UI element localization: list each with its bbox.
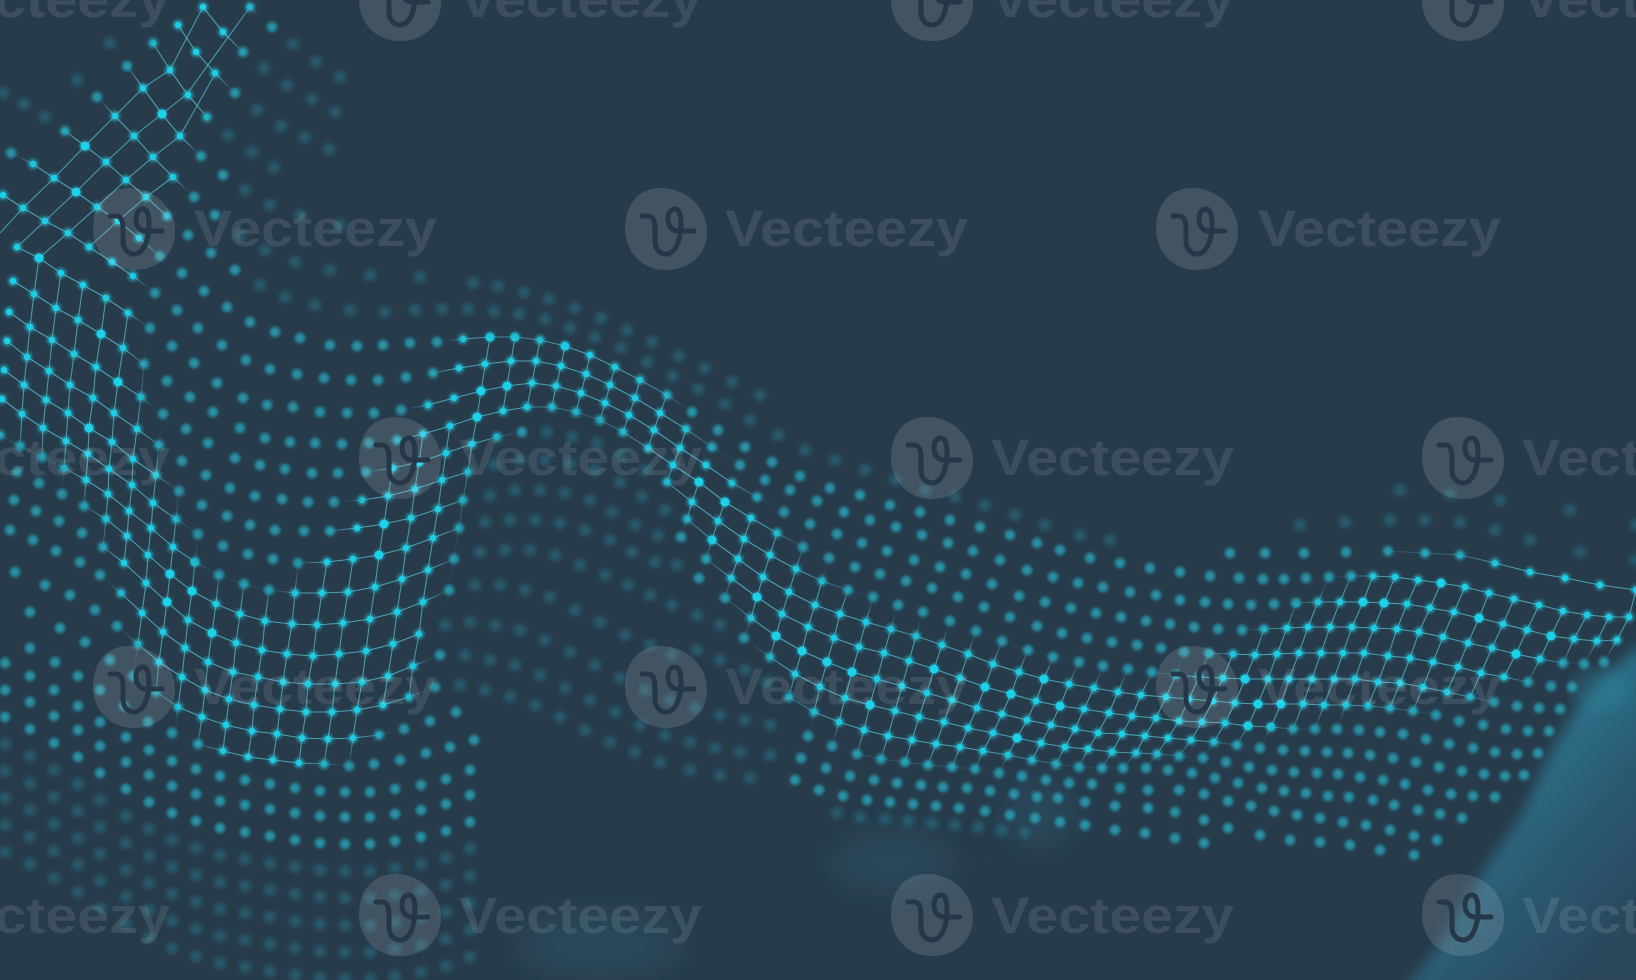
watermark: row 5 <box>0 874 1636 956</box>
mesh row lines <box>2 8 1633 771</box>
watermark: row 5: Vecteezy <box>459 887 703 944</box>
watermark: row 4: Vecteezy <box>194 658 438 715</box>
watermark: row 1 <box>0 0 1636 41</box>
larger highlighted nodes <box>39 114 1551 738</box>
watermark: row 3 <box>0 417 1636 499</box>
watermark: row 4 <box>93 646 1502 728</box>
watermark: row 2: Vecteezy <box>194 200 438 257</box>
watermark: row 3: Vecteezy <box>991 429 1235 486</box>
watermark: row 2 <box>93 188 1502 270</box>
foreground blurred hump, bottom right <box>1403 630 1636 980</box>
watermark: row 4: Vecteezy <box>725 658 969 715</box>
watermark: row 2: Vecteezy <box>725 200 969 257</box>
watermark: row 5: Vecteezy <box>991 887 1235 944</box>
bottom blurred smudges <box>515 787 1075 973</box>
watermark: row 4: Vecteezy <box>1258 658 1502 715</box>
watermark: row 2: Vecteezy <box>1258 200 1502 257</box>
watermark: row 3: Vecteezy <box>459 429 703 486</box>
mesh column lines <box>0 7 1636 780</box>
